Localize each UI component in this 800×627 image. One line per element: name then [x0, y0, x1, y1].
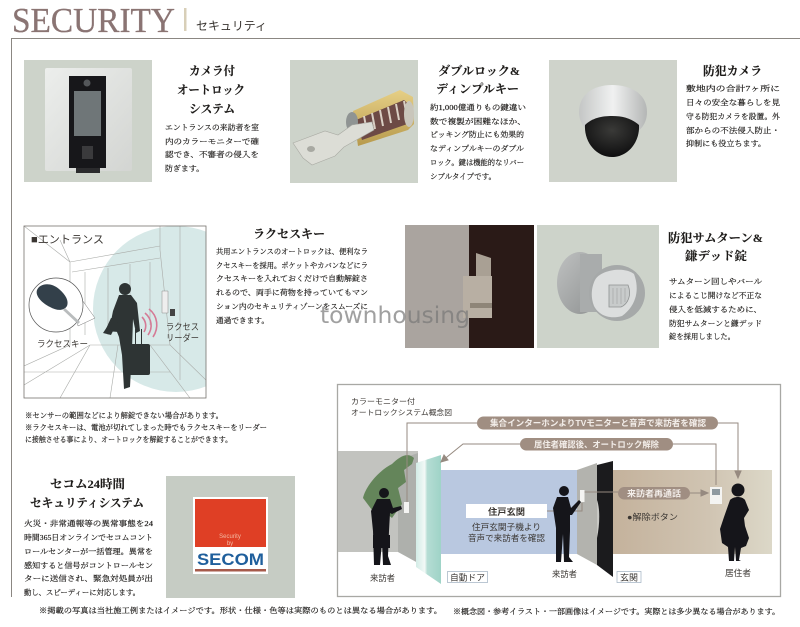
text: double lock and dimple key: ロック。鍵は機能的なリバー	[430, 158, 524, 167]
text: SECOM 24-hour security system: 動し、スピーディーに対応します。	[24, 588, 140, 597]
text: double lock and dimple key: シブルタイプです。	[430, 172, 496, 181]
text: SECOM 24-hour security system: 時間365日オンラインでセコムコント	[24, 533, 153, 542]
photo: auto-lock entrance panel	[24, 60, 152, 182]
footnotes: ※概念図・参考イラスト・一部画像はイメージです。実際とは多少異なる場合があります。	[453, 607, 780, 616]
labels: visitor, resident, door tags: 来訪者	[552, 569, 577, 579]
text: hands-free key: ション内のセキュリティゾーンをスムーズに	[216, 302, 368, 311]
text: security camera: 抑制にも役立ちます。	[686, 139, 766, 148]
section title: SECURITY: SECURITY	[12, 1, 175, 40]
text: double lock and dimple key: ダブルロック&	[438, 63, 520, 78]
text: camera auto-lock system: システム	[189, 102, 235, 116]
text: camera auto-lock system: 内のカラーモニターで確	[165, 137, 260, 146]
illustration: entrance with hands-free key: ■エントランス	[31, 234, 104, 246]
section title: SECURITY	[12, 1, 267, 40]
text: security camera: 日々の安全な暮らしを見	[686, 98, 780, 107]
text: SECOM 24-hour security system: 感知すると信号がコントロールセン	[24, 561, 153, 570]
text: SECOM 24-hour security system: セコム24時間	[50, 476, 125, 491]
text: SECOM 24-hour security system: セキュリティシステム	[30, 496, 144, 510]
text: double lock and dimple key: 数で複製が困難なほか、	[430, 117, 526, 126]
text: SECOM 24-hour security system: 火災・非常通報等の異常事態を24	[24, 519, 153, 528]
silhouette: visitor at auto door	[371, 488, 402, 565]
text: thumb-turn and deadbolt: 侵入を低減するために、	[669, 305, 762, 314]
text: release button: ●解除ボタン	[627, 512, 678, 522]
photo: deadbolt lock	[405, 225, 534, 348]
pill: auto-lock release: 居住者確認後、オートロック解除	[534, 440, 659, 450]
diagram title	[351, 396, 452, 417]
text: security camera: 守る防犯カメラを設置。外	[686, 112, 781, 121]
pill: visitor re-call: 来訪者再通話	[627, 488, 682, 498]
diagram title: オートロックシステム概念図	[351, 407, 452, 417]
diagram: auto-lock system concept	[338, 384, 780, 596]
text: security camera: 防犯カメラ	[703, 63, 762, 78]
text: hands-free key notes: ※センサーの範囲などにより解錠できない場合があります。	[25, 411, 223, 420]
text: camera auto-lock system: 認でき、不審者の侵入を	[165, 150, 259, 159]
photo: thumb-turn	[537, 225, 659, 348]
connector lines and arrows	[407, 423, 741, 511]
silhouette: visitor at unit door	[553, 486, 581, 562]
text: hands-free key: 共用エントランスのオートロックは、便利なラ	[216, 247, 368, 256]
text: thumb-turn and deadbolt: によるこじ開けなど不正な	[669, 291, 762, 300]
text: hands-free key: ラクセスキー	[253, 227, 325, 241]
photo: double lock and dimple key	[290, 60, 418, 183]
text: hands-free key notes: ※ラクセスキーは、電池が切れてしまった時でもラクセスキーをリーダー	[25, 423, 267, 432]
diagram background zones	[338, 451, 772, 584]
silhouette: woman with suitcase	[103, 283, 150, 389]
devices	[404, 487, 722, 513]
labels: visitor, resident, door tags	[370, 568, 751, 583]
text: security camera	[686, 63, 781, 148]
text: double lock and dimple key: なディンプルキーのダブル	[430, 144, 525, 153]
text: unit entrance handset: 住戸玄関子機より	[472, 522, 541, 532]
labels: visitor, resident, door tags: 居住者	[725, 568, 751, 578]
text: hands-free key notes	[25, 411, 267, 444]
text: thumb-turn and deadbolt: 錠を採用しました。	[669, 332, 735, 341]
illustration: entrance with hands-free key: ラクセス	[166, 322, 199, 332]
text: double lock and dimple key: ディンプルキー	[436, 82, 519, 96]
text: hands-free key: れるので、両手に荷物を持っていてもマン	[216, 288, 368, 297]
text: camera auto-lock system: エントランスの来訪者を室	[165, 123, 259, 132]
diagram title: カラーモニター付	[351, 396, 416, 406]
text: unit entrance handset	[468, 522, 545, 543]
text: camera auto-lock system	[165, 63, 260, 173]
labels: visitor, resident, door tags: 来訪者	[370, 573, 395, 583]
text: SECOM 24-hour security system: ロールセンターが一括管理。異常を	[24, 547, 153, 556]
pill: TV monitor and voice check: 集合インターホンよりTVモニターと音声で来訪者を確認	[490, 418, 706, 428]
section title: SECURITY: セキュリティ	[196, 19, 267, 33]
text: SECOM 24-hour security system	[24, 476, 153, 597]
pill: auto-lock release	[520, 438, 673, 450]
text: hands-free key notes: に接触させる事により、オートロックを解錠することができます。	[25, 435, 232, 444]
photo: security camera	[549, 60, 677, 182]
pill: TV monitor and voice check	[477, 416, 718, 430]
text: camera auto-lock system: 防ぎます。	[165, 164, 204, 173]
text: thumb-turn and deadbolt	[668, 230, 763, 341]
illustration: entrance with hands-free key: リーダー	[166, 332, 199, 343]
text: hands-free key	[216, 227, 368, 325]
silhouette: resident	[720, 484, 749, 561]
text: unit entrance handset: 音声で来訪者を確認	[468, 533, 545, 543]
text: security camera: 敷地内の合計7ヶ所に	[686, 84, 780, 93]
text: camera auto-lock system: カメラ付	[189, 63, 235, 78]
pill: visitor re-call	[618, 487, 690, 500]
watermark: townhousing	[320, 303, 470, 329]
icon: wireless signal arcs	[142, 309, 157, 337]
text: hands-free key: クセスキーを入れておくだけで自動解錠さ	[216, 274, 368, 283]
SECOM logo panel: Security	[219, 534, 241, 540]
footnotes	[39, 606, 780, 616]
labels: visitor, resident, door tags: 玄関	[620, 572, 638, 582]
SECOM logo panel: by	[227, 541, 233, 547]
labels: visitor, resident, door tags: 自動ドア	[450, 572, 485, 582]
illustration: entrance with hands-free key: ラクセスキー	[37, 339, 88, 349]
SECOM logo panel: SECOM	[197, 550, 264, 569]
text: thumb-turn and deadbolt: 防犯サムターンと鎌デッド	[669, 319, 762, 328]
text: double lock and dimple key: 約1,000億通りもの鍵違い	[430, 103, 526, 112]
SECOM logo panel	[166, 476, 295, 598]
text: thumb-turn and deadbolt: 鎌デッド錠	[685, 248, 747, 263]
plant	[363, 455, 414, 518]
text: hands-free key: クセスキーを採用。ポケットやカバンなどにラ	[216, 261, 368, 270]
footnotes: ※掲載の写真は当社施工例またはイメージです。形状・仕様・色等は実際のものとは異なる場合があります。	[39, 606, 442, 615]
text: security camera: 部からの不法侵入防止・	[686, 126, 780, 135]
label: unit entrance: 住戸玄関	[488, 506, 525, 517]
text: thumb-turn and deadbolt: 防犯サムターン&	[668, 230, 763, 245]
text: SECOM 24-hour security system: ターに送信され、緊急対処員が出	[24, 574, 153, 583]
label: unit entrance	[466, 504, 547, 518]
text: camera auto-lock system: オートロック	[177, 83, 245, 97]
text: thumb-turn and deadbolt: サムターン回しやバール	[669, 277, 763, 286]
text: double lock and dimple key	[430, 63, 526, 181]
text: double lock and dimple key: ピッキング防止にも効果的	[430, 130, 524, 139]
inset: key fob	[29, 278, 95, 332]
text: hands-free key: 通過できます。	[216, 316, 269, 325]
illustration: entrance with hands-free key	[24, 226, 206, 398]
